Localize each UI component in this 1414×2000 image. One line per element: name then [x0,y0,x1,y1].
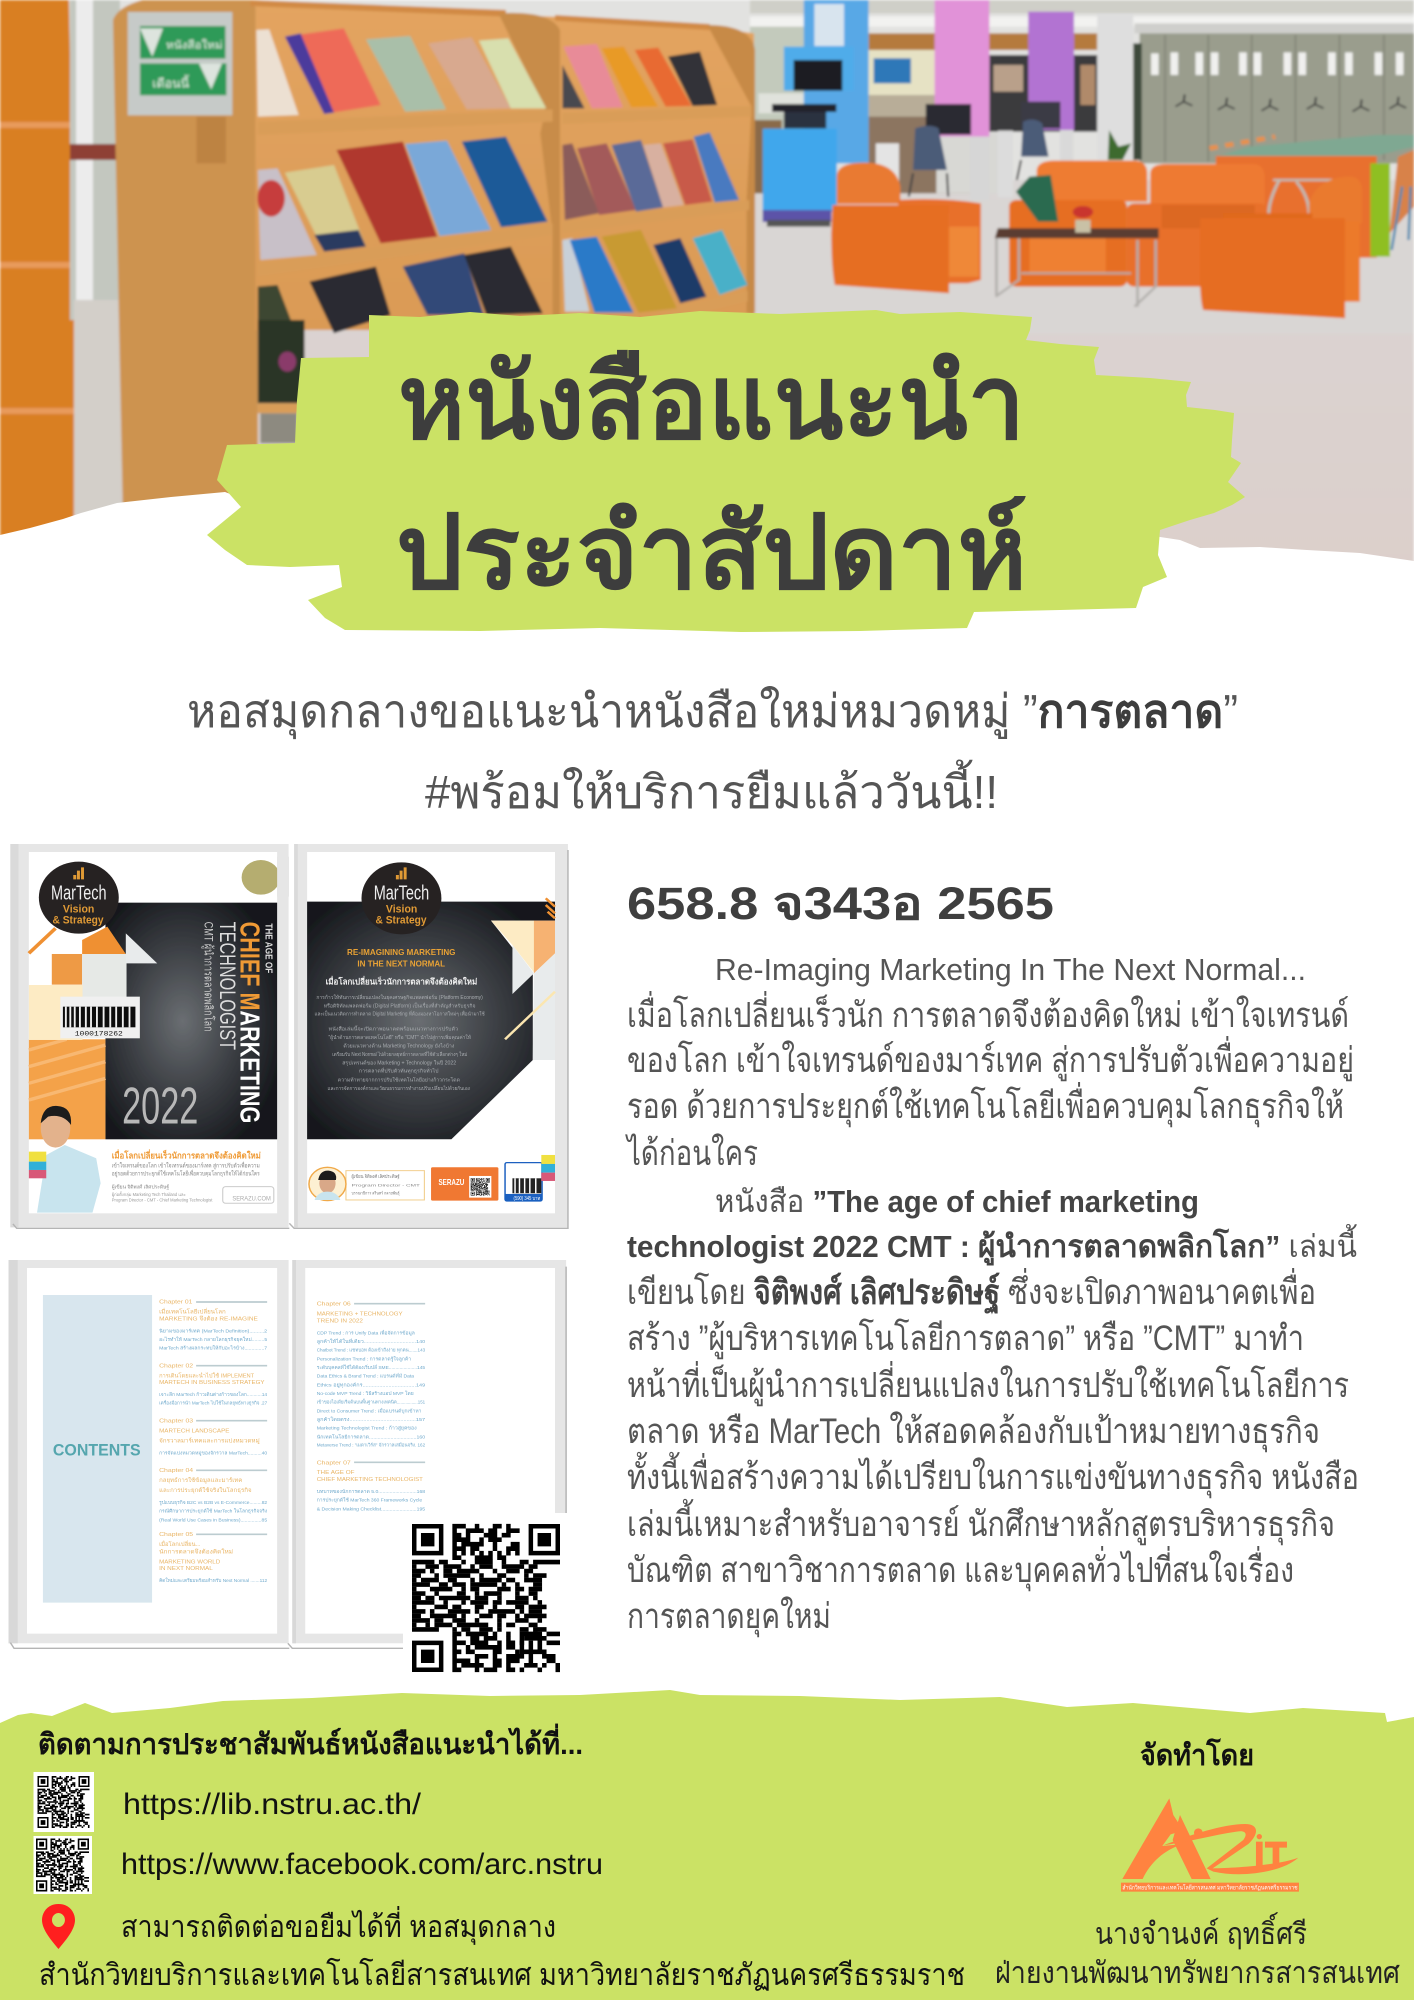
back cover copy [314,993,485,1092]
chapter list right: เข้าของไอเดียเริ่มต้นบนพื้นฐานทางเทคนิค.................151 [317,1397,425,1406]
chapter list: Chapter 05 [159,1532,194,1538]
chapter list: การเดินโดยและนำไปใช้ IMPLEMENT [159,1372,255,1379]
footer green band [0,1690,1414,2000]
chapter list: MarTech สร้างผลกระทบให้กับอะไรบ้าง..............7 [159,1345,267,1352]
MarTech badge: Vision [63,902,94,915]
chapter list right: CHIEF MARKETING TECHNOLOGIST [317,1477,423,1483]
barcode box: (590) 345 บาท [514,1196,541,1202]
chapter list: นักการตลาดจึงต้องคิดใหม่ [159,1548,233,1555]
sofa [1037,161,1147,202]
book page: contents left [9,1260,289,1648]
subtitle line 2: #พร้อมให้บริการยืมแล้ววันนี้!! [425,759,998,818]
book page: contents right [288,1260,566,1648]
back cover copy: หรือดิจิทัลแพลตฟอร์ม (Digital Platform) เป็นเรื่องที่สำคัญสำหรับธุรกิจ [324,1002,475,1009]
chapter list right: Ethics อยู่ทุกองค์กร...................................149 [317,1382,425,1388]
chapter list: Chapter 03 [159,1419,194,1424]
chapter list: MARTECH LANDSCAPE [159,1429,229,1434]
chapter list right: THE AGE OF [317,1470,355,1476]
chapter list: นิยามของมาร์เทค (MarTech Definition)..........2 [159,1328,267,1334]
description text block: ได้ก่อนใคร [625,1133,758,1173]
footer panel [0,1690,1414,2000]
left wood panel [0,0,78,560]
website QR [34,1772,94,1832]
chapter list right: ระดับบุคคลที่ใช้ได้ต้องเริ่มปลี่ SME.....................145 [317,1364,425,1371]
MarTech badge back: MarTech [374,880,429,904]
chapter list: เครื่องมือการนำ MarTech ไปใช้ในกลยุทธ์ทางธุรกิจ .27 [159,1400,267,1407]
title panel [207,310,1245,632]
green brush shape [207,310,1245,632]
back cover copy: เตรียมรับ Next Normal ไปด้วยกลยุทธ์การตลาดที่ใช้ตัวเลือกต่างๆ ใหม่ [332,1050,467,1058]
rotated cover title: THE AGE OF [263,923,274,973]
publisher badge [242,860,280,895]
contents panel [43,1295,152,1603]
back cover heading: IN THE NEXT NORMAL [357,959,445,969]
back cover copy: สรุปเทรนด์ของ Marketing + Technology ในปี 2022 [342,1060,456,1066]
chapter list: Chapter 04 [159,1468,194,1474]
author photo [29,1106,101,1213]
chapter list right: Chapter 07 [317,1461,352,1466]
description text block: หนังสือ ”The age of chief marketing [715,1184,1199,1219]
chapter list right: CDP Trend : การ Unify Data เพื่อจัดการข้อมูล [317,1330,415,1336]
chapter list right: Chapter 06 [317,1302,352,1308]
plant [1108,130,1131,160]
publisher card [431,1167,498,1201]
author card: บรรณาธิการ สรินทร์ กลายพันธุ์ [352,1190,400,1197]
organisation line: สำนักวิทยบริการและเทคโนโลยีสารสนเทศ มหาวิทยาลัยราชภัฏนครศรีธรรมราช [39,1957,965,1992]
torn white page edge [0,492,1414,680]
author card [309,1167,424,1201]
coffee table [995,228,1159,238]
footer heading: ติดตามการประชาสัมพันธ์หนังสือแนะนำได้ที่... [38,1723,583,1761]
chapter list right: Personalization Trend : การตลาดรู้ใจลูกค้า [317,1356,411,1362]
books row 2 [258,168,317,260]
book cover: front: เข้าใจเทรนด์ของโลก เข้าใจเทรนด์ของมาร์เทค สู่การปรับตัวเพื่อความ [112,1161,260,1169]
rotated cover title [201,922,274,1123]
staff name: นางจำนงค์ ฤทธิ์ศรี [1095,1912,1307,1951]
monitors [926,104,971,135]
chapter list [159,1300,268,1584]
book cover: front: ผู้เขียน จิติพงศ์ เลิศประดิษฐ์ [112,1184,169,1191]
study table [1216,135,1414,157]
lockers [1135,23,1414,33]
chapter list right: บทบาทของนักการตลาด 5.0...........................168 [317,1489,425,1495]
chapter list right: ลูกค้าโดยตรง...........................................157 [317,1416,425,1423]
chapter list right: TREND IN 2022 [317,1319,364,1324]
cover tagline: เมื่อโลกเปลี่ยนเร็วนักการตลาดจึงต้องคิดใหม่ [112,1149,261,1160]
contents word: CONTENTS [53,1441,141,1459]
chapter list right: Data Ethics & Brand Trend : แบรนด์ที่มี Data [317,1373,414,1380]
book cover: front: ผู้ก่อตั้งกลุ่ม Marketing Tech Thailand และ [112,1191,186,1198]
sign [128,12,232,115]
chapter list: MARTECH IN BUSINESS STRATEGY [159,1380,265,1386]
chapter list: กรณีศึกษาการประยุกต์ใช้ MarTech ในโลกธุรกิจจริง [159,1508,268,1515]
grey chairs [913,126,947,170]
back cover copy: และเป็นแนวคิดการทำตลาด Digital Marketing ที่ต้องมองหาโอกาสใหม่ๆ เพื่อนำมาใช้ [315,1010,485,1017]
rotated cover title: TECHNOLOGIST [215,922,239,1050]
gap behind shelf [70,0,124,520]
contact line: สามารถติดต่อขอยืมได้ที่ หอสมุดกลาง [121,1906,556,1946]
chapter list: รูปแบบธุรกิจ B2C vs B2B vs E-Commerce.........82 [159,1500,267,1506]
chapter list right: การประยุกต์ใช้ MarTech 360 Frameworks Cycle [317,1497,422,1504]
books row 3 [258,285,295,330]
Serazu box: SERAZU.COM [232,1196,271,1203]
chapter list: และการประยุกต์ใช้จริงในโลกธุรกิจ [159,1486,252,1494]
barcode box [505,1155,555,1202]
white pillars [1097,13,1133,160]
book cover: front [10,844,289,1228]
panel: library photo [0,0,1414,570]
chapter list right: & Decision Making Checklist.........................195 [317,1507,425,1512]
logo: A2IT: สำนักวิทยบริการและเทคโนโลยีสารสนเทศ มหาวิทยาลัยราชภัฏนครศรีธรรมราช [1122,1883,1298,1891]
book cover: back [289,844,568,1228]
back cover copy: ด้วยแนวทางด้าน Marketing Technology ยังไงบ้าง [343,1042,455,1050]
chapter list right: ลูกค้าให้ได้ในที่เดียว...................................140 [317,1338,425,1345]
chapter list: เมื่อเทคโนโลยีเปลี่ยนโลก [159,1308,226,1316]
MarTech badge [39,862,119,934]
publisher card: SERAZU [438,1177,464,1187]
title line 2: ประจำสัปดาห์ [396,495,1027,610]
book cover: front: Program Director - CMT - Chief Marketing Technologist [112,1198,213,1203]
barcode sticker [60,997,140,1038]
rotated cover title: CMT ผู้นำการตลาดพลิกโลก [201,922,216,1032]
back cover copy: และการจัดการองค์กรและวัฒนธรรมการทำงานปรับเปลี่ยนไปด้วยกันเอง [327,1084,470,1092]
logo: A2IT [1121,1798,1299,1892]
chapter list: การจัดแบ่งหมวดหมู่ของจักรวาล MarTech..........40 [159,1451,267,1456]
back cover copy: การก้าวให้ทันการเปลี่ยนแปลงในยุคเศรษฐกิจแพลตฟอร์ม (Platform Economy) [316,993,483,1001]
Serazu box [223,1187,274,1203]
icon: location pin [42,1904,75,1949]
blue column [804,0,869,163]
chapter list: เจาะลึก MarTech ก้าวเดินต่างก้าวของโลก...........14 [159,1391,267,1398]
description text block: เขียนโดย จิติพงศ์ เลิศประดิษฐ์ ซึ่งจะเปิดภาพอนาคตเพื่อ [627,1268,1316,1315]
year: 2022 [122,1077,198,1135]
author card: ผู้เขียน จิติพงศ์ เลิศประดิษฐ์ [352,1173,400,1180]
chapter list: MARKETING WORLD [159,1560,221,1565]
chapter list right [317,1302,425,1512]
bag [1016,175,1058,222]
chapter list right: No-code MVP Trend : วิธีสร้างแอป MVP โดย [317,1390,414,1397]
made-by heading: จัดทำโดย [1140,1737,1254,1772]
chapter list: อะไรทำให้ MarTech กลายโลกธุรกิจยุคใหม่.........5 [159,1336,267,1343]
chapter list right: Direct to Consumer Trend : เมื่อแบรนด์บุกเข้าหา [317,1408,422,1414]
MarTech badge back: & Strategy [376,913,427,926]
back cover heading: เมื่อโลกเปลี่ยนเร็วนักการตลาดจึงต้องคิดใหม่ [326,975,477,986]
chapter list right: Metaverse Trend : "เมตาเวิร์ส" จักรวาลเสมือนจริง. 162 [317,1442,425,1449]
barcode sticker: 1000178262 [75,1031,123,1038]
catalog number heading: 658.8 จ343อ 2565 [627,878,1054,929]
pink column [935,0,989,137]
shelf boards [258,109,553,135]
description text block: การตลาดยุคใหม่ [627,1596,831,1637]
facebook QR [34,1836,92,1894]
chair right [1309,177,1362,223]
bookshelf: เดือนนี้ [152,75,189,91]
rotated cover title: CHIEF MARKETING [234,922,266,1123]
bookshelf: หนังสือใหม่ [166,38,223,51]
kiosk [784,47,854,91]
photo: back of library [750,0,1414,333]
books row 1 [256,29,299,117]
chapter list: กลยุทธ์การใช้ข้อมูลและมาร์เทค [159,1476,242,1484]
chapter list: คิดใหม่และเตรียมพร้อมสำหรับ Next Normal .......112 [159,1577,267,1584]
back cover heading: RE-IMAGINING MARKETING [347,947,455,957]
row 4 leftovers [258,320,305,403]
chapter list right: Marketing Technologist Trend : ก้าวสู่ยุคของ [317,1425,417,1432]
back cover copy: การตลาดที่ปรับตัวทันทุกธุรกิจทั่วไป [359,1067,439,1075]
chapter list right: Chatbot Trend : แชทบอท ต้องเข้าถึงง่าย ทุกคน.......143 [317,1347,425,1354]
MarTech badge back: Vision [386,902,417,915]
title line 1: หนังสือแนะนำ [398,345,1025,460]
chapter list: จักรวาลมาร์เทคและการแบ่งหมวดหมู่ [159,1437,260,1444]
facebook URL: https://www.facebook.com/arc.nstru [121,1848,603,1881]
book cover: front: อยู่รอดด้วยการประยุกต์ใช้เทคโนโลยีเพื่อควบคุมโลกธุรกิจให้ได้ก่อนใคร [112,1169,260,1177]
back cover copy: หนังสือเล่มนี้จะเปิดภาพอนาคตพร้อมแนวทางการปรับตัว [329,1025,458,1033]
MarTech badge: & Strategy [53,913,104,926]
description text block [625,952,1359,1637]
purple column [1028,12,1074,130]
back cover copy: "ผู้นำด้านการตลาดเทคโนโลยี" หรือ "CMT" นำไปสู่การเพิ่มคุณค่าให้ [329,1033,471,1041]
chapter list: Chapter 01 [159,1300,193,1306]
chair left [837,163,900,204]
large QR code [403,1513,573,1683]
chapter list: IN NEXT NORMAL [159,1566,213,1572]
chapter list: เมื่อโลกเปลี่ยน... [159,1540,201,1548]
description text block: technologist 2022 CMT : ผู้นำการตลาดพลิกโลก” เล่มนี้ [627,1224,1357,1266]
chapter list: (Real World Use Cases in Business)...............85 [159,1518,267,1523]
chapter list: MARKETING จึงต้อง RE-IMAGINE [159,1316,258,1322]
author card: Program Director - CMT [352,1183,421,1188]
website URL: https://lib.nstru.ac.th/ [123,1788,422,1821]
MarTech badge: MarTech [51,880,107,904]
back cover copy: ความท้าทายจากการปรับใช้เทคโนโลยีอย่างก้าวกระโดด [338,1077,460,1083]
chapter list right: MARKETING + TECHNOLOGY [317,1312,403,1317]
chapter list right: นักเทคโนโลยีการตลาด.................................160 [317,1434,425,1440]
bookshelf [113,0,755,510]
MarTech badge back [361,862,441,934]
description text block: Re-Imaging Marketing In The Next Normal... [715,952,1306,987]
subtitle line 1: หอสมุดกลางขอแนะนำหนังสือใหม่หมวดหมู่ ”การตลาด” [187,685,1238,740]
back cover heading [326,947,477,986]
chapter list: Chapter 02 [159,1364,194,1369]
